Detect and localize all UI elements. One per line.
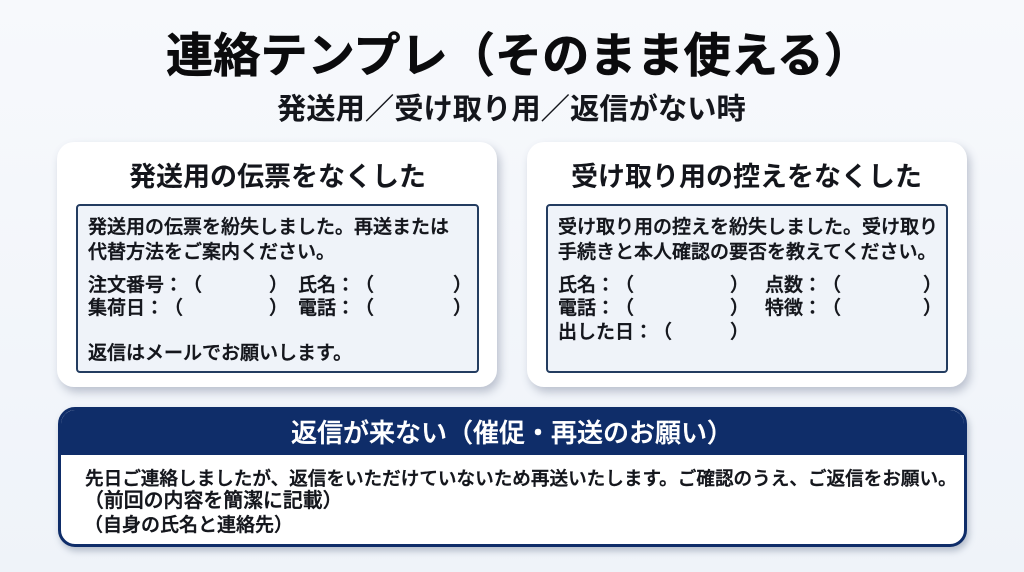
field: name: 氏名：（ xyxy=(558,275,634,296)
field: item count xyxy=(765,274,942,296)
field: name xyxy=(298,274,472,296)
field: features: 特徴：（ xyxy=(765,298,841,319)
message text xyxy=(88,216,449,263)
header text: 返信が来ない（催促・再送のお願い） xyxy=(291,418,733,448)
panel: no reply xyxy=(58,407,967,547)
field: phone: 電話：（ xyxy=(558,298,634,319)
note: name and contact: （自身の氏名と連絡先） xyxy=(84,515,293,536)
field: phone: ） xyxy=(453,298,472,319)
subtitle: 発送用／受け取り用／返信がない時 xyxy=(277,93,746,126)
field: name: ） xyxy=(453,275,472,296)
template box xyxy=(76,204,479,373)
field: name: 氏名：（ xyxy=(298,275,374,296)
field: phone xyxy=(298,298,472,319)
panel: lost shipping slip xyxy=(57,142,497,387)
field: order number xyxy=(88,274,288,296)
field: name xyxy=(558,274,749,296)
message text: 先日ご連絡しましたが、返信をいただけていないため再送いたします。ご確認のうえ、ご返信をお願い。 xyxy=(85,468,957,489)
panel header xyxy=(58,407,967,455)
field: pickup date: ） xyxy=(269,298,288,319)
field: features xyxy=(765,298,942,319)
field: sent date: 出した日：（ xyxy=(558,322,672,343)
field: pickup date xyxy=(88,298,288,319)
title: 連絡テンプレ（そのまま使える） xyxy=(166,30,871,83)
field: phone xyxy=(558,298,749,319)
message text: 発送用の伝票を紛失しました。再送または xyxy=(88,217,449,238)
field: features: ） xyxy=(923,298,942,319)
field: order number: 注文番号：（ xyxy=(88,275,202,296)
message text: 代替方法をご案内ください。 xyxy=(88,242,335,263)
field: phone: 電話：（ xyxy=(298,298,374,319)
message text xyxy=(558,216,938,263)
field: pickup date: 集荷日：（ xyxy=(88,298,183,319)
panel heading: 受け取り用の控えをなくした xyxy=(571,162,922,192)
panel heading: 発送用の伝票をなくした xyxy=(129,162,426,192)
field: sent date: ） xyxy=(730,322,749,343)
note: previous content: （前回の内容を簡潔に記載） xyxy=(84,490,343,512)
panel: lost receipt stub xyxy=(527,142,967,387)
field: sent date xyxy=(558,322,749,343)
template box xyxy=(546,204,948,373)
field: order number: ） xyxy=(269,275,288,296)
message text: 手続きと本人確認の要否を教えてください。 xyxy=(558,242,936,263)
field: item count: ） xyxy=(923,275,942,296)
message text: 受け取り用の控えを紛失しました。受け取り xyxy=(558,217,938,238)
field: item count: 点数：（ xyxy=(765,275,841,296)
reply note: 返信はメールでお願いします。 xyxy=(88,343,352,364)
field: phone: ） xyxy=(730,298,749,319)
field: name: ） xyxy=(730,275,749,296)
